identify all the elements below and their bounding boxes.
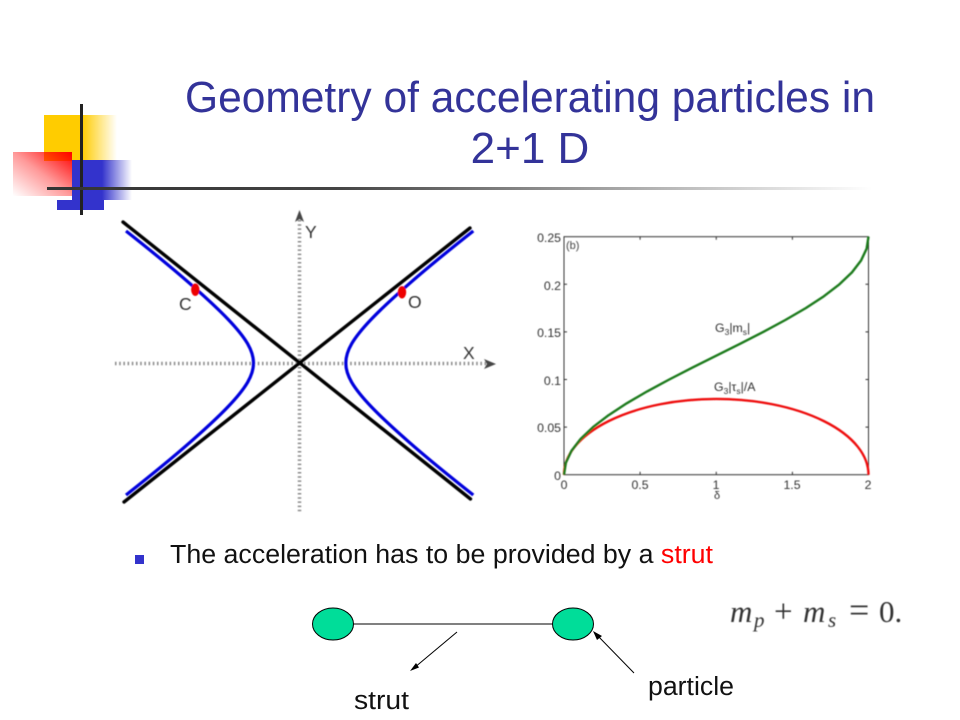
- point O: O: [408, 292, 422, 312]
- curve label mass: |m: [729, 321, 743, 335]
- x tick labels: [561, 478, 872, 492]
- curve label mass: |: [747, 321, 750, 335]
- bullet marker: [135, 555, 144, 564]
- x tick labels: 0.5: [631, 478, 649, 492]
- point C: C: [179, 294, 192, 314]
- right hyperbola branch: [346, 231, 473, 495]
- strut label: strut: [354, 687, 409, 715]
- x tick labels: 2: [865, 478, 872, 492]
- y tick labels: 0.15: [537, 326, 561, 340]
- x axis: [115, 359, 496, 369]
- plot frame and ticks: [564, 237, 868, 475]
- strut line: [353, 623, 553, 625]
- y axis: [295, 210, 304, 513]
- strut diagram: [312, 608, 734, 715]
- y tick labels: 0.2: [544, 279, 561, 293]
- particle label: particle: [648, 673, 734, 701]
- left particle: [312, 608, 354, 640]
- panel tag: (b): [566, 240, 579, 252]
- axis label X: X: [463, 343, 475, 363]
- curve label tension: s: [736, 386, 741, 396]
- curve label tension: G: [714, 380, 724, 394]
- diagram: hyperbolic trajectories: [115, 210, 496, 513]
- equation: m: [803, 594, 825, 629]
- equation: s: [828, 608, 836, 632]
- axis label Y: Y: [305, 222, 317, 242]
- equation: =: [849, 590, 869, 630]
- equation: 0.: [879, 594, 902, 629]
- equation: m: [730, 594, 752, 629]
- y tick labels: 0.25: [537, 231, 561, 245]
- asymptotes: [123, 222, 470, 502]
- logo: overlapping squares: [13, 104, 132, 215]
- left hyperbola branch: [126, 231, 254, 495]
- point O: [398, 286, 422, 312]
- point C: [179, 284, 200, 314]
- equation: +: [774, 594, 793, 630]
- curve label tension: |/A: [741, 380, 756, 394]
- curve label mass: 3: [725, 327, 730, 337]
- y tick labels: 0: [554, 469, 561, 483]
- right particle: [552, 608, 594, 640]
- y tick labels: 0.1: [544, 374, 561, 388]
- y tick labels: [537, 231, 561, 483]
- equation: p: [752, 608, 764, 632]
- title: Geometry of accelerating particles in: [185, 73, 875, 122]
- y tick labels: 0.05: [537, 421, 561, 435]
- equation: [730, 590, 902, 632]
- x tick labels: 1: [713, 478, 720, 492]
- curve label tension: |τ: [728, 380, 737, 394]
- arrow to particle label: [593, 631, 634, 673]
- curve label tension: 3: [724, 386, 729, 396]
- x tick labels: 0: [561, 478, 568, 492]
- x axis symbol: δ: [714, 490, 720, 502]
- arrow to strut label: [410, 632, 457, 671]
- green curve: [564, 237, 868, 475]
- title: [185, 73, 875, 173]
- title: 2+1 D: [471, 124, 589, 173]
- title rule: [47, 187, 872, 190]
- bullet text: The acceleration has to be provided by a strut: [170, 541, 713, 569]
- red curve: [564, 399, 868, 475]
- curve label mass: s: [743, 327, 747, 337]
- curve label mass: G: [715, 321, 725, 335]
- x tick labels: 1.5: [783, 478, 801, 492]
- line chart: [537, 231, 872, 502]
